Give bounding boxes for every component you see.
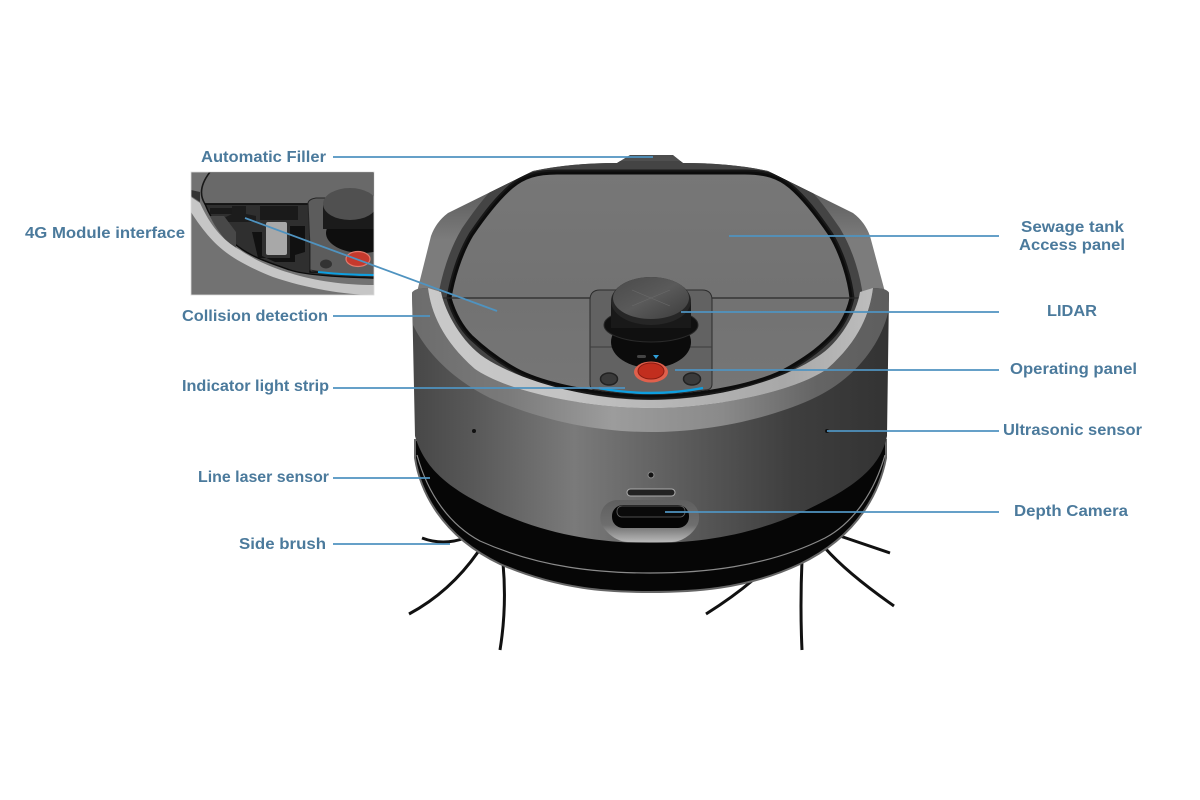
inset: 4G module close-up bbox=[191, 172, 374, 295]
inset silver ring bbox=[191, 197, 374, 295]
upper shoulder bbox=[412, 288, 889, 432]
callout: Operating panel: Operating panel bbox=[1010, 361, 1137, 378]
inset left notch bbox=[191, 190, 200, 202]
LIDAR bbox=[604, 277, 698, 368]
dark lid rim bbox=[417, 155, 885, 402]
callout: Sewage tank Access panel: Access panel bbox=[1019, 237, 1125, 254]
callout: 4G Module interface: 4G Module interface bbox=[25, 225, 185, 242]
inset lid bbox=[201, 172, 374, 204]
ultrasonic holes bbox=[472, 429, 829, 433]
sewage tank lid bbox=[450, 173, 851, 396]
inset controls bbox=[346, 252, 370, 266]
robot vacuum bbox=[409, 155, 894, 650]
inset compartment bbox=[205, 204, 373, 278]
callout: Automatic Filler: Automatic Filler bbox=[201, 149, 326, 166]
callout: 4G Module interface bbox=[25, 218, 497, 311]
callout: Ultrasonic sensor: Ultrasonic sensor bbox=[1003, 422, 1142, 439]
operating panel bbox=[590, 290, 712, 394]
depth camera bbox=[600, 500, 699, 542]
callout: Collision detection: Collision detection bbox=[182, 308, 328, 325]
microphone and slit bbox=[627, 472, 675, 496]
callout: LIDAR: LIDAR bbox=[1047, 303, 1097, 320]
inset LIDAR bbox=[326, 229, 374, 253]
callout: Line laser sensor: Line laser sensor bbox=[198, 469, 329, 486]
light strip bbox=[599, 388, 703, 393]
inset silver module bbox=[266, 222, 287, 255]
inset panel bbox=[308, 198, 374, 277]
inset frame bbox=[191, 172, 374, 295]
black base ring bbox=[415, 440, 886, 592]
stop button bbox=[634, 362, 668, 382]
silver collision ring bbox=[428, 288, 873, 408]
callout: Sewage tank Access panel: Sewage tank bbox=[1021, 219, 1124, 236]
callout: Sewage tank Access panel bbox=[729, 219, 1125, 254]
robot body bbox=[412, 288, 889, 543]
callout: Side brush: Side brush bbox=[239, 536, 326, 553]
callout: Depth Camera: Depth Camera bbox=[1014, 503, 1128, 520]
lid seam bbox=[441, 297, 860, 299]
rim shading bbox=[450, 173, 851, 396]
callout: Indicator light strip: Indicator light strip bbox=[182, 378, 329, 395]
side brushes bbox=[409, 536, 894, 650]
